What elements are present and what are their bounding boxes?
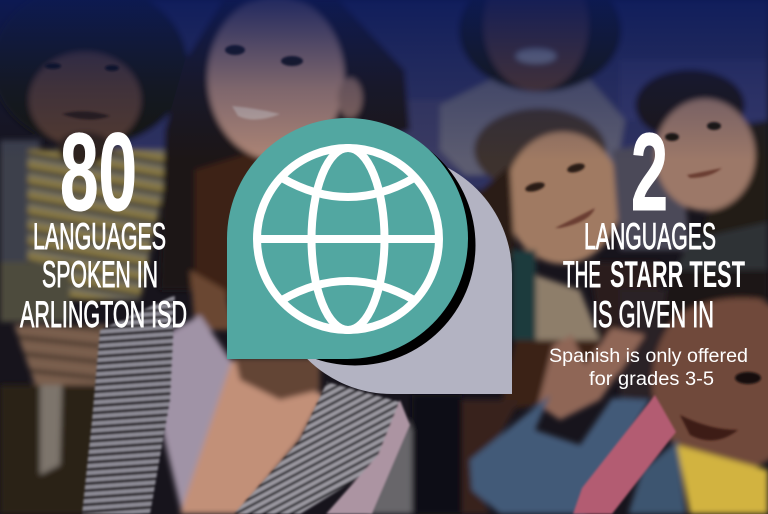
icon: globe — [257, 148, 439, 330]
note line 2: for grades 3-5 — [589, 369, 714, 390]
teal speech bubble — [227, 118, 468, 359]
caption line 1: LANGUAGES — [33, 216, 166, 257]
stat: 80 languages spoken in Arlington ISD — [20, 111, 187, 335]
black bubble shadow — [234, 124, 476, 366]
note line 1: Spanish is only offered — [549, 346, 748, 367]
caption line 3: ARLINGTON ISD — [20, 294, 187, 335]
number 80: 80 — [60, 111, 137, 234]
grey speech bubble behind — [272, 154, 512, 394]
caption line 2: SPOKEN IN — [42, 254, 158, 295]
stat: 2 languages the STARR test is given in — [549, 111, 748, 390]
number 2: 2 — [631, 111, 668, 234]
caption line 2 start: THE — [563, 254, 601, 295]
